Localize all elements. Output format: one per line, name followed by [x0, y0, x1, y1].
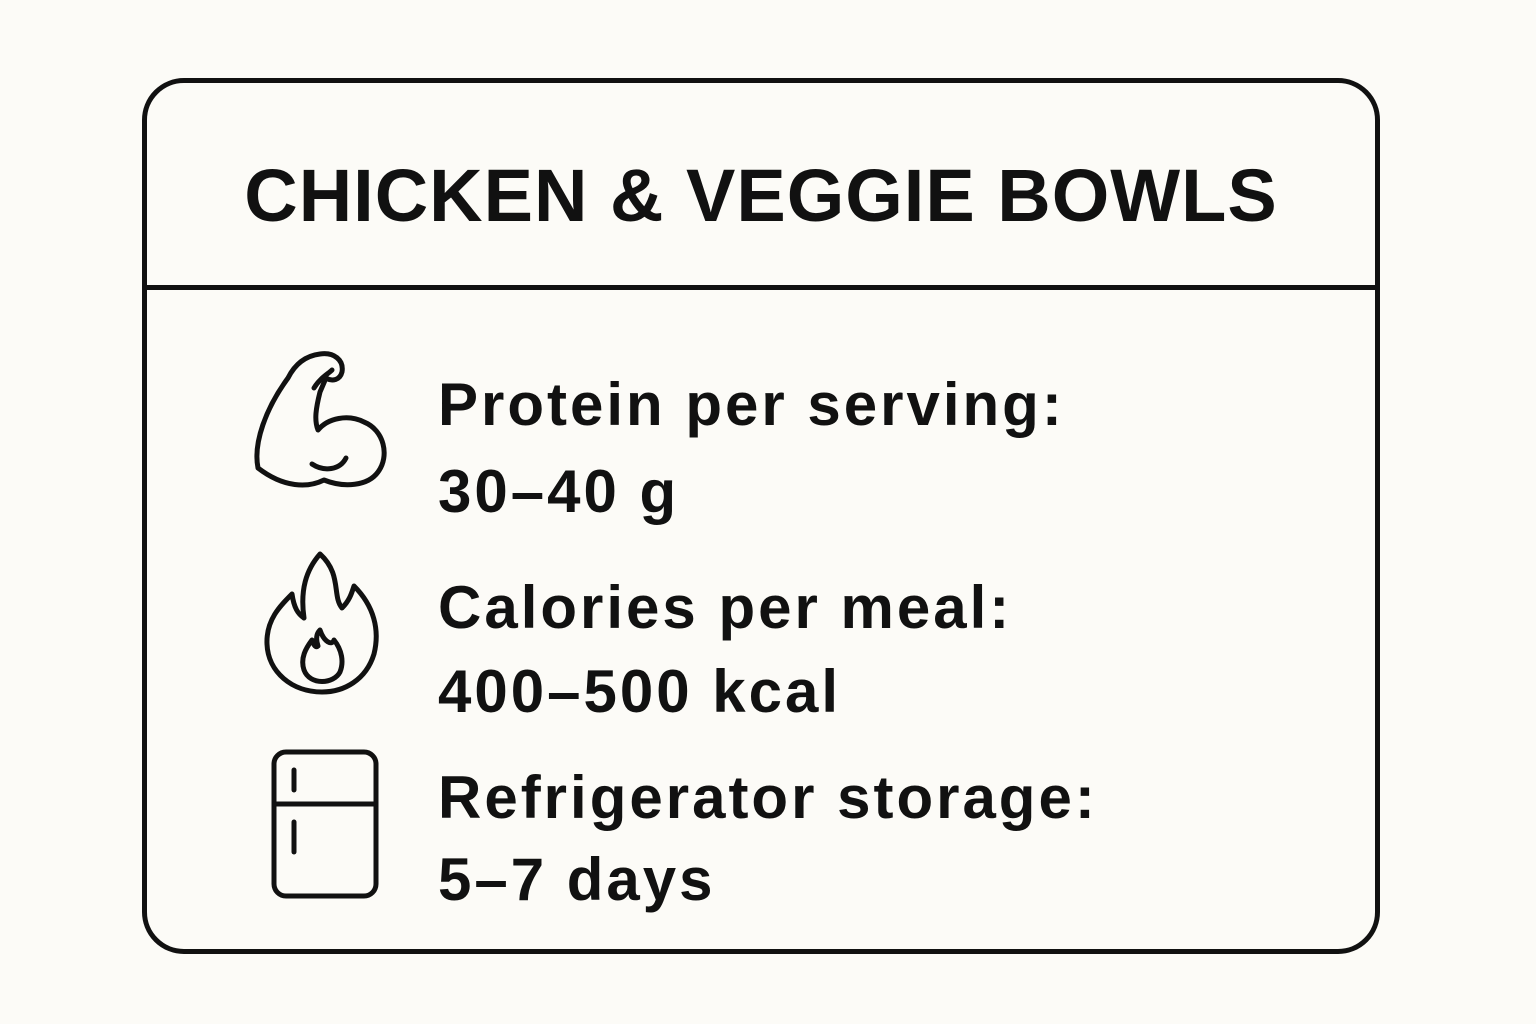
text: protein: Protein per serving:: [438, 371, 1065, 438]
title: CHICKEN & VEGGIE BOWLS: [244, 154, 1278, 237]
text: 400–500 kcal: [438, 658, 841, 725]
icon: flexed arm: [254, 351, 387, 488]
icon: fridge: [272, 750, 378, 898]
text: 5–7 days: [438, 846, 716, 913]
text: storage: Refrigerator storage:: [438, 764, 1098, 831]
icon: flame: [264, 552, 379, 694]
text: 30–40 g: [438, 458, 679, 525]
card panel: [142, 78, 1380, 954]
text: calories: Calories per meal:: [438, 574, 1012, 641]
